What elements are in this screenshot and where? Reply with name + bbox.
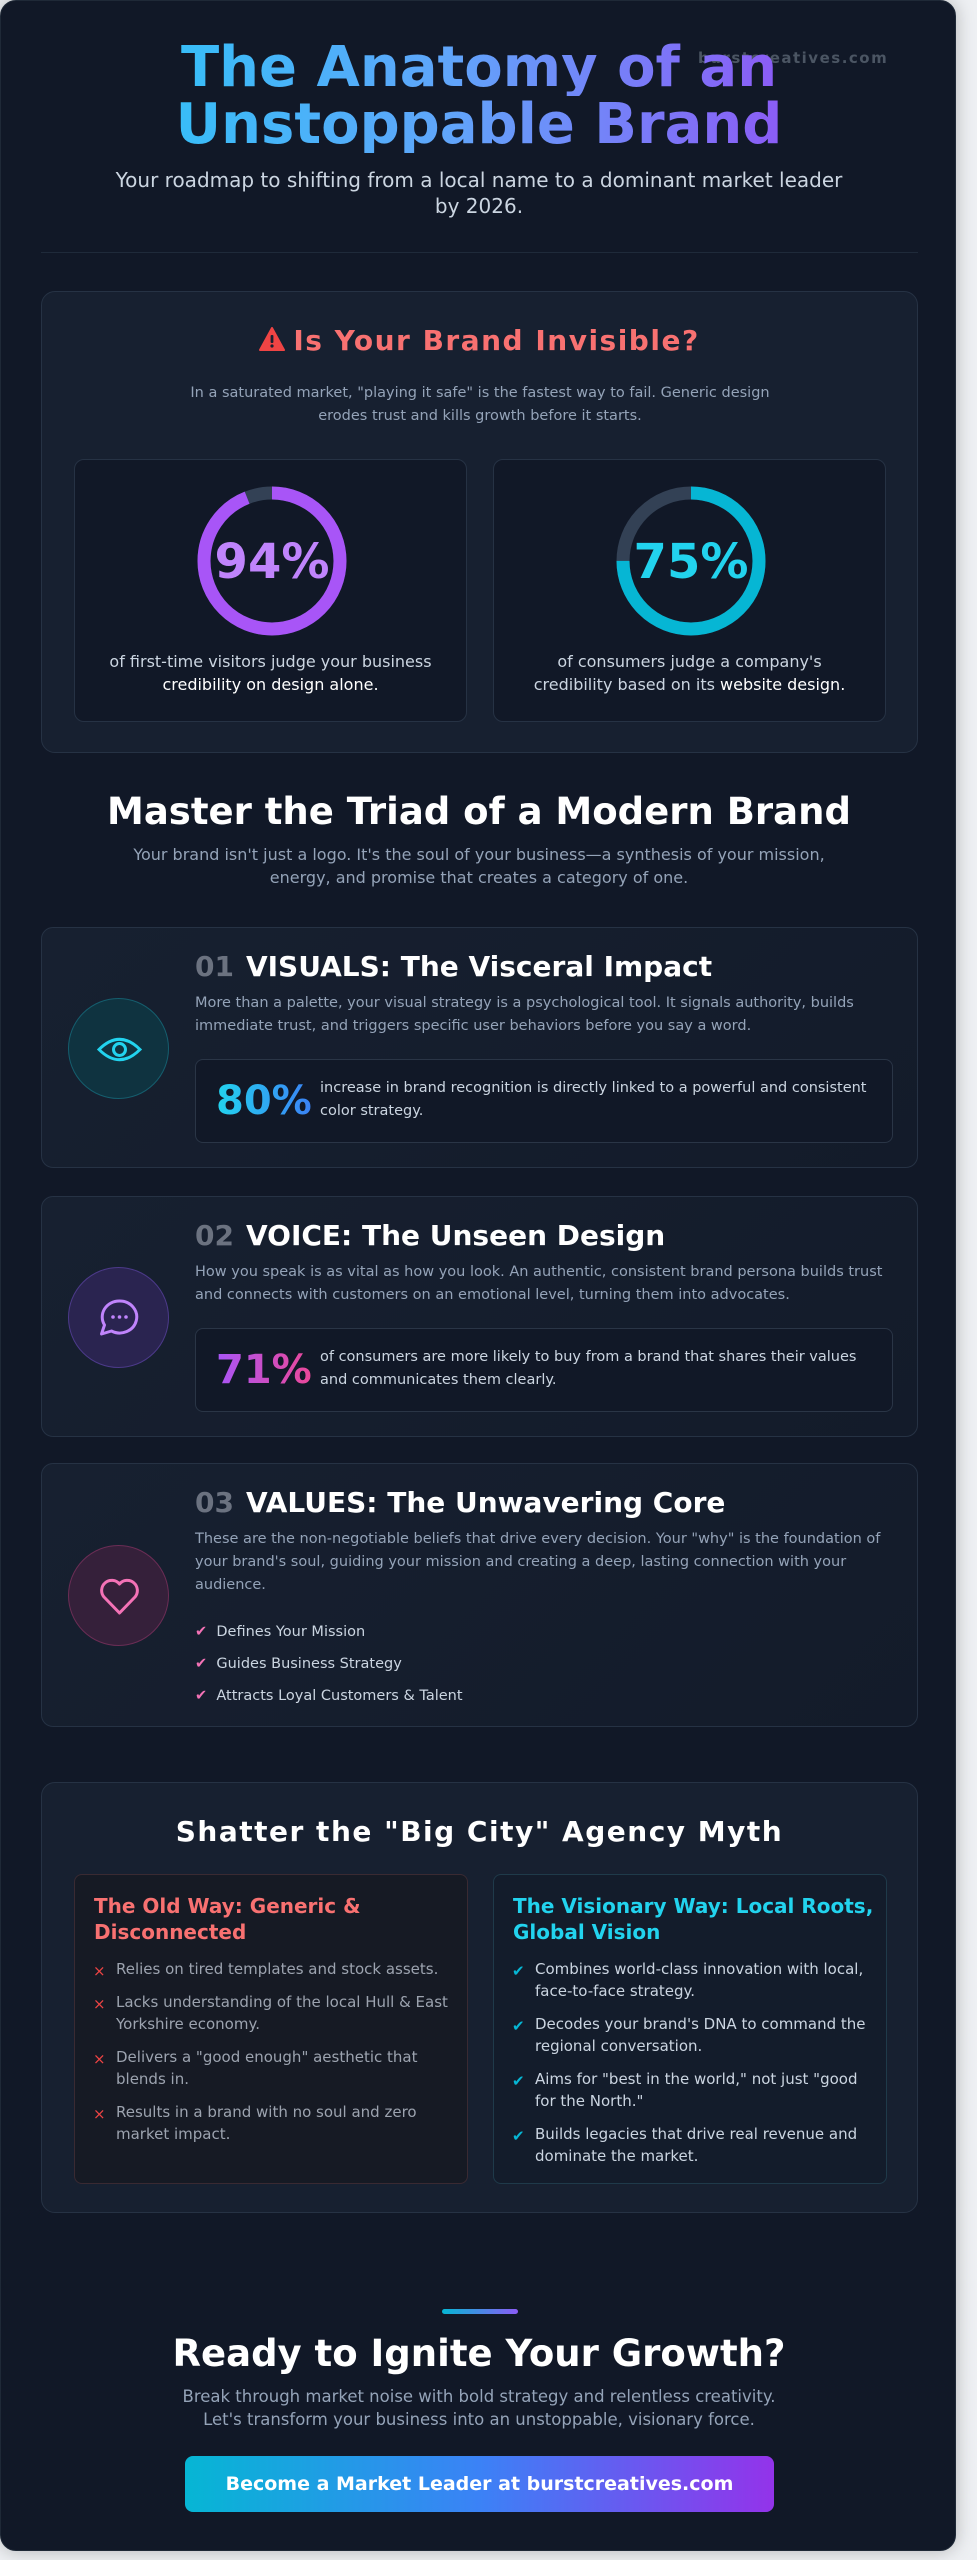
- CTA button: [185, 2456, 774, 2512]
- stat box 80%: increase in brand recognition is directly linked to a powerful and consistent color strategy.: [320, 1080, 866, 1119]
- heading: Shatter the "Big City" Agency Myth: [176, 1815, 783, 1848]
- visionary way card: [493, 1874, 887, 2184]
- title: The Anatomy of an: [181, 35, 777, 100]
- panel: is your brand invisible: [41, 291, 918, 753]
- visionary list: Builds legacies that drive real revenue and dominate the market.: [535, 2125, 857, 2165]
- old way list: Delivers a "good enough" aesthetic that blends in.: [116, 2048, 418, 2088]
- checklist: ✔ Attracts Loyal Customers & Talent: [195, 1688, 463, 1704]
- old way list: [93, 1960, 448, 2143]
- text: These are the non-negotiable beliefs that drive every decision. Your "why" is the foundation of your brand's soul, guiding your mission and creating a deep, lasting connection with your audience.: [195, 1531, 880, 1593]
- old way list: Results in a brand with no soul and zero market impact.: [116, 2103, 417, 2143]
- old way list: Relies on tired templates and stock assets.: [116, 1960, 438, 1978]
- stat box 71%: of consumers are more likely to buy from a brand that shares their values and communicates them clearly.: [320, 1349, 856, 1388]
- old way heading: The Old Way: Generic & Disconnected: [94, 1894, 361, 1944]
- old way list: Lacks understanding of the local Hull & East Yorkshire economy.: [116, 1993, 448, 2033]
- stat box 80%: [195, 1059, 893, 1143]
- caption: of first-time visitors judge your business: [109, 652, 432, 671]
- checklist: ✔ Guides Business Strategy: [195, 1656, 402, 1672]
- title: Unstoppable Brand: [176, 92, 782, 157]
- card: visuals: [41, 927, 918, 1168]
- heading: invisible: Is Your Brand Invisible?: [293, 324, 700, 357]
- heading: 01 VISUALS: The Visceral Impact: [195, 950, 712, 983]
- ring chart 75%: 75%: [634, 534, 748, 590]
- visionary list: [512, 1960, 866, 2165]
- intro text: In a saturated market, "playing it safe" is the fastest way to fail. Generic design erodes trust and kills growth before it starts.: [190, 385, 770, 424]
- old way list: ×: [93, 1962, 106, 1980]
- visionary list: Combines world-class innovation with local, face-to-face strategy.: [535, 1960, 863, 2000]
- panel: agency myth: [41, 1782, 918, 2213]
- CTA button: Become a Market Leader at burstcreatives.com: [226, 2473, 733, 2495]
- stat box 71%: 71%: [216, 1347, 312, 1393]
- caption: [109, 652, 432, 694]
- old way card: [74, 1874, 468, 2184]
- caption: credibility on design alone.: [162, 675, 379, 694]
- visionary list: ✔: [512, 1962, 525, 1980]
- visionary list: ✔: [512, 2072, 525, 2090]
- card: voice: [41, 1196, 918, 1437]
- accent bar: [442, 2309, 518, 2314]
- stat card 75%: [493, 459, 886, 722]
- old way list: ×: [93, 2105, 106, 2123]
- old way list: ×: [93, 2050, 106, 2068]
- stat box 80%: 80%: [216, 1078, 312, 1124]
- text: How you speak is as vital as how you look. An authentic, consistent brand persona builds trust and connects with customers on an emotional level, turning them into advocates.: [195, 1264, 882, 1303]
- CTA text: Break through market noise with bold strategy and relentless creativity. Let's transform your business into an unstoppable, visionary force.: [182, 2387, 775, 2429]
- icon: chat: [68, 1267, 169, 1368]
- caption: [534, 652, 845, 694]
- ring chart 75%: [616, 486, 766, 636]
- checklist: [195, 1624, 463, 1704]
- icon: heart: [68, 1545, 169, 1646]
- stat box 71%: [195, 1328, 893, 1412]
- visionary list: Aims for "best in the world," not just "good for the North.": [535, 2070, 857, 2110]
- ring chart 94%: [198, 486, 346, 636]
- caption: credibility based on its website design.: [534, 675, 845, 694]
- icon: eye: [68, 998, 169, 1099]
- subtitle: Your roadmap to shifting from a local name to a dominant market leader by 2026.: [116, 168, 842, 218]
- heading: 02 VOICE: The Unseen Design: [195, 1219, 665, 1252]
- old way list: ×: [93, 1995, 106, 2013]
- watermark: burstcreatives.com: [698, 49, 888, 67]
- visionary heading: The Visionary Way: Local Roots, Global Vision: [513, 1894, 873, 1944]
- CTA heading: Ready to Ignite Your Growth?: [173, 2332, 785, 2375]
- title: [176, 35, 782, 157]
- heading: 03 VALUES: The Unwavering Core: [195, 1486, 725, 1519]
- card: values: [41, 1463, 918, 1727]
- checklist: ✔ Defines Your Mission: [195, 1624, 365, 1640]
- visionary list: ✔: [512, 2127, 525, 2145]
- visionary list: Decodes your brand's DNA to command the regional conversation.: [535, 2015, 866, 2055]
- stat card 94%: [74, 459, 467, 722]
- section subtitle: Your brand isn't just a logo. It's the soul of your business—a synthesis of your mission, energy, and promise that creates a category of one.: [133, 845, 825, 887]
- section heading: triad: Master the Triad of a Modern Brand: [107, 790, 851, 833]
- caption: of consumers judge a company's: [557, 652, 822, 671]
- visionary list: ✔: [512, 2017, 525, 2035]
- text: More than a palette, your visual strategy is a psychological tool. It signals authority, builds immediate trust, and triggers specific user behaviors before you say a word.: [195, 995, 854, 1034]
- ring chart 94%: 94%: [215, 534, 329, 590]
